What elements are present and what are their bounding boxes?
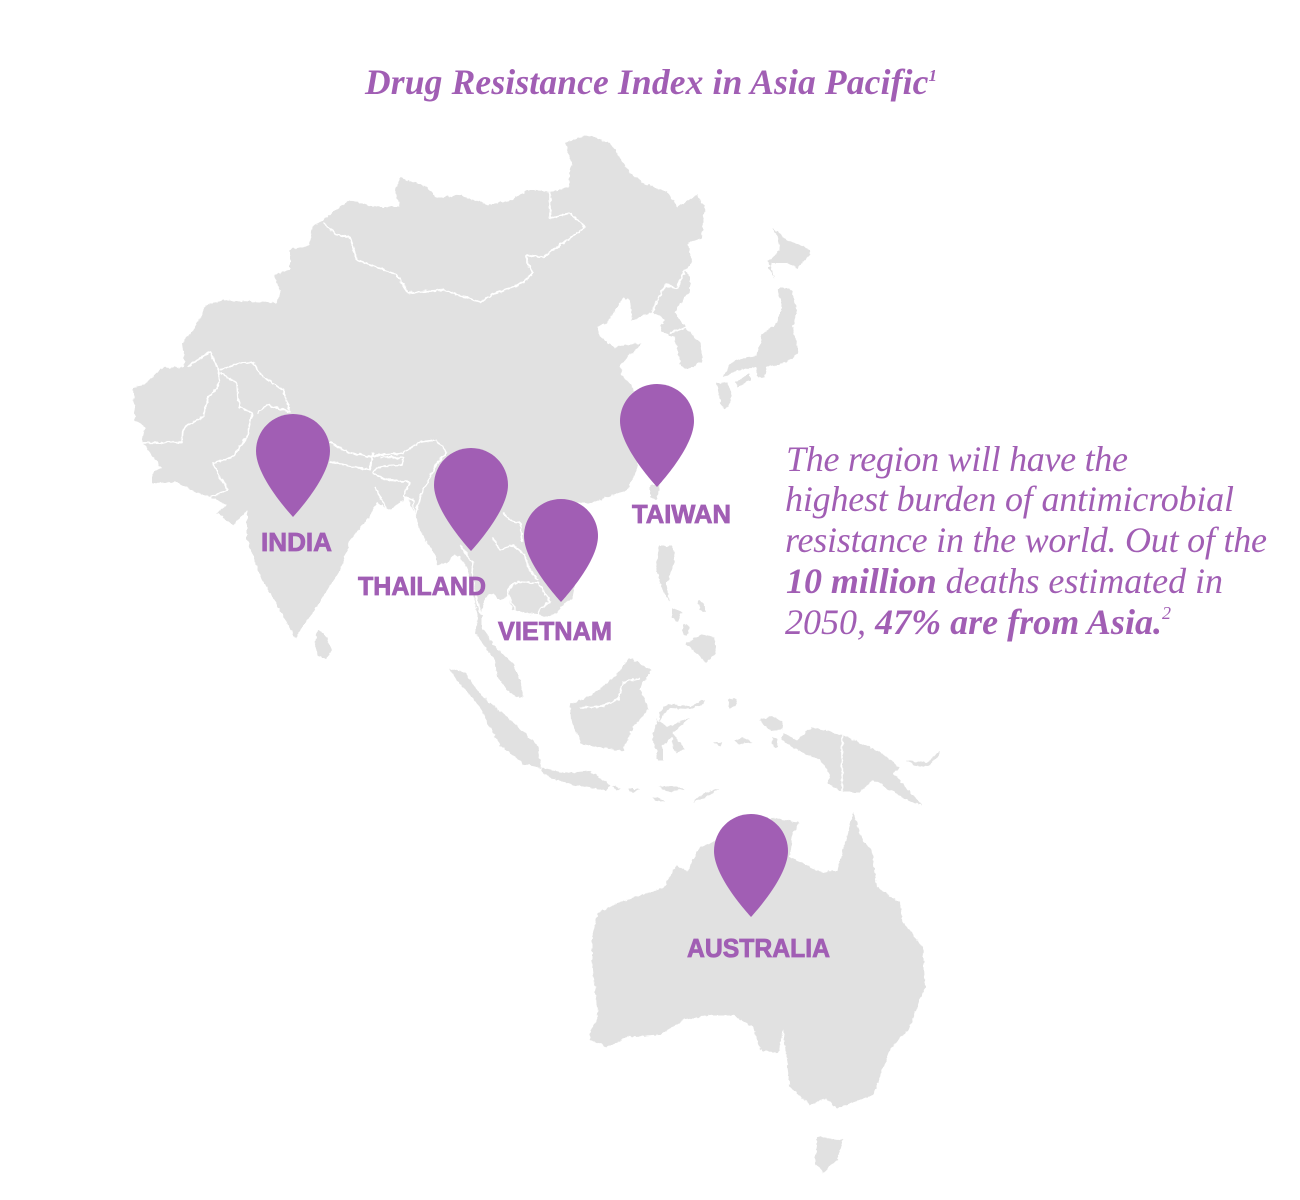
map: Australia [590,812,925,1108]
label: Australia: AUSTRALIA [687,933,830,963]
map: Japan [717,228,810,410]
label: Taiwan: TAIWAN [632,499,731,529]
map: Asian mainland [133,135,705,698]
map: Taiwan [650,485,660,500]
map: Borneo [570,658,651,751]
map: Maluku islands [714,698,754,746]
text block: antimicrobial resistance burden: 2 [1162,603,1171,623]
map: country borders [142,192,842,792]
pin: Taiwan [620,384,694,487]
pin: Vietnam [524,499,598,602]
title: Drug Resistance Index in Asia Pacific [365,62,928,102]
pin: Thailand [434,448,508,551]
text block: antimicrobial resistance burden [785,439,1267,642]
text block: antimicrobial resistance burden: 2050, 47% are from Asia. [785,602,1162,642]
text block: antimicrobial resistance burden: 10 million deaths estimated in [786,561,1223,601]
label: Thailand: THAILAND [358,571,486,601]
pin: Australia [714,814,788,917]
map: Sri Lanka [315,630,332,659]
map: Philippines [656,546,716,663]
map: Tasmania [815,1137,843,1173]
map: Sumatra [449,668,541,768]
title: 1 [928,66,937,85]
map of Asia Pacific [133,135,940,1173]
map: Sulawesi [652,700,705,760]
label: Vietnam: VIETNAM [498,616,612,646]
text block: antimicrobial resistance burden: The region will have the [786,439,1128,479]
text block: antimicrobial resistance burden: highest burden of antimicrobial [785,479,1234,519]
map: New Guinea [760,716,940,805]
pin: India [256,414,330,517]
label: India: INDIA [261,527,332,557]
text block: antimicrobial resistance burden: resistance in the world. Out of the [785,520,1267,560]
map: Java and Lesser Sunda islands [541,768,720,802]
